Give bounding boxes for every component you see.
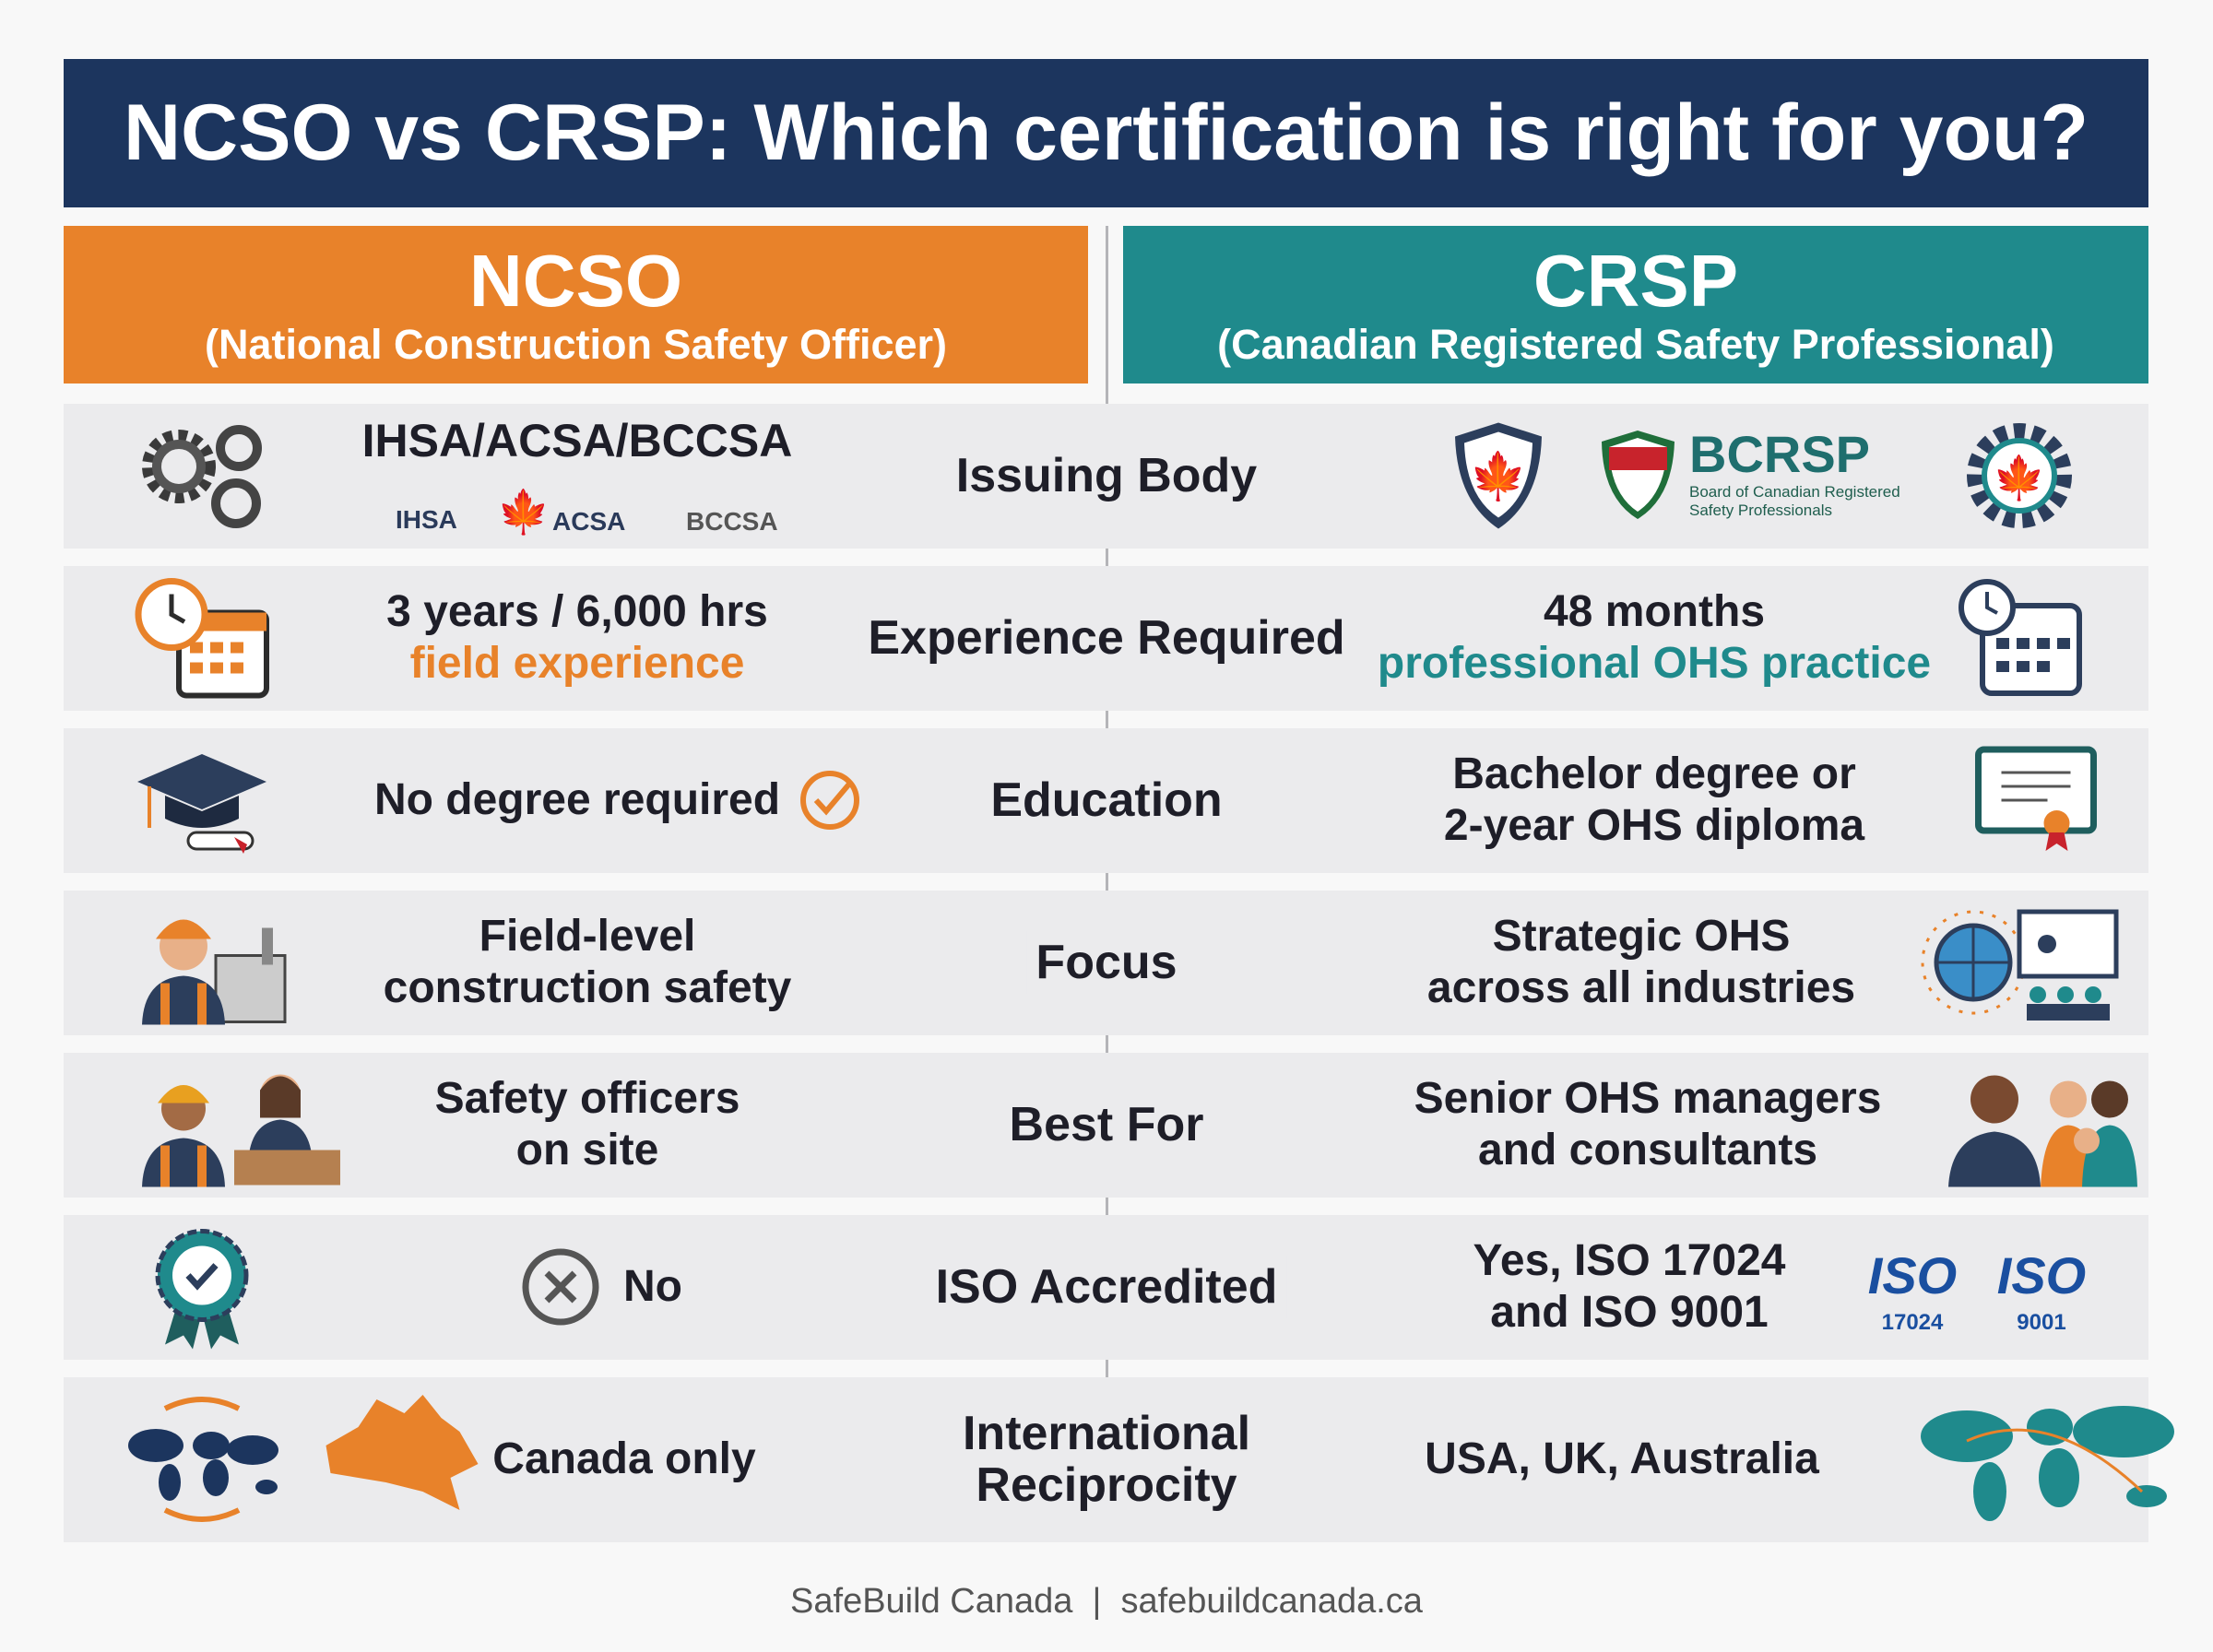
- icon: canada map: [326, 1395, 478, 1510]
- text: 3 years / 6,000 hrs: [386, 587, 768, 688]
- label: Issuing Body: Issuing Body: [956, 449, 1257, 502]
- row: International Reciprocity: [64, 1377, 2148, 1542]
- text: Yes ISO: Yes, ISO 17024: [1473, 1236, 1785, 1285]
- title bar: NCSO vs CRSP: Which certification is right for you?: [124, 88, 2089, 177]
- text: Canada only: Canada only: [492, 1434, 756, 1483]
- text: 48 months: [1378, 587, 1931, 688]
- header: CRSP: (Canadian Registered Safety Professional): [1217, 321, 2054, 368]
- text: Field-level construction safety: Field-level: [479, 912, 695, 961]
- text: Safety officers on site: [435, 1074, 740, 1174]
- icon: graduation cap: [137, 754, 266, 854]
- header: NCSO: NCSO: [469, 240, 682, 322]
- text: Yes ISO: [1473, 1236, 1785, 1337]
- logos: ISO 17024 / ISO 9001: [1868, 1246, 2086, 1335]
- text: No: No: [623, 1262, 682, 1311]
- label: International Reciprocity: International: [963, 1407, 1250, 1460]
- icon: clock calendar teal: [1959, 579, 2082, 696]
- row: ISO Accredited: [64, 1215, 2148, 1360]
- header: NCSO: [64, 226, 1088, 384]
- row: Issuing Body: [64, 404, 2148, 549]
- row: Experience Required: [64, 566, 2148, 711]
- text: 48 months: professional OHS practice: [1378, 639, 1931, 688]
- text: Senior OHS managers: Senior OHS managers: [1414, 1074, 1881, 1123]
- header: CRSP: CRSP: [1533, 240, 1738, 322]
- text: Strategic OHS: Strategic OHS: [1493, 912, 1790, 961]
- icon: certificate: [1975, 747, 2097, 851]
- icon: x circle: [522, 1248, 599, 1326]
- text: Senior OHS managers: [1414, 1074, 1881, 1174]
- icon: team: [1948, 1075, 2137, 1187]
- logo: BCRSP: BCRSP: [1689, 425, 1870, 483]
- icon: clock calendar: [135, 578, 269, 699]
- logos: shield: [1455, 422, 1542, 529]
- icon: gears: [142, 425, 262, 528]
- text: Field-level construction safety: [384, 912, 791, 1012]
- title bar: [64, 59, 2148, 207]
- icon: teal world map: [1921, 1406, 2174, 1521]
- label: Best For: Best For: [1010, 1098, 1203, 1151]
- logos: ISO 17024 / ISO 9001: ISO: [1997, 1246, 2086, 1304]
- text: 3 years / 6,000 hrs: field experience: [410, 639, 744, 688]
- label: International Reciprocity: Reciprocity: [976, 1458, 1237, 1512]
- row: Best For: [64, 1053, 2148, 1198]
- logos: IHSA ACSA BCCSA: ACSA: [552, 507, 625, 536]
- label: Experience Required: Experience Required: [868, 611, 1345, 665]
- text: Bachelor degree: [1444, 749, 1864, 850]
- logos: IHSA ACSA BCCSA: 🍁: [497, 488, 550, 536]
- icon: check circle: [800, 771, 859, 830]
- logo: BCRSP: [1602, 425, 1900, 519]
- logos: IHSA ACSA BCCSA: [396, 488, 778, 536]
- icon: globe presentation: [1922, 909, 2119, 1021]
- logos: shield: 🍁: [1470, 450, 1527, 502]
- header: NCSO: (National Construction Safety Officer): [205, 321, 947, 368]
- text: Yes ISO: and ISO 9001: [1490, 1288, 1769, 1337]
- icon: world with arrows: [128, 1397, 278, 1522]
- text: Safety officers on site: on site: [516, 1126, 658, 1174]
- text: USA UK Australia: USA, UK, Australia: [1425, 1434, 1819, 1483]
- text: No degree required: No degree required: [374, 775, 780, 824]
- label: International Reciprocity: [953, 1402, 1260, 1516]
- logos: IHSA ACSA BCCSA: IHSA: [396, 505, 457, 534]
- icon: construction worker: [142, 920, 286, 1025]
- icon: badge ribbon: [155, 1229, 249, 1350]
- icon: maple gear: [1967, 423, 2072, 528]
- label: Education: Education: [990, 773, 1223, 827]
- text: Strategic OHS: [1427, 912, 1855, 1012]
- logos: IHSA ACSA BCCSA: BCCSA: [686, 507, 778, 536]
- text: Field-level construction safety: construction safety: [384, 963, 791, 1012]
- logo: BCRSP: Board of Canadian Registered: [1689, 483, 1900, 501]
- text: Senior OHS managers: and consultants: [1478, 1126, 1817, 1174]
- logo: BCRSP: Safety Professionals: [1689, 502, 1832, 519]
- logos: ISO 17024 / ISO 9001: 9001: [2017, 1310, 2066, 1335]
- logos: ISO 17024 / ISO 9001: 17024: [1882, 1310, 1943, 1335]
- row: Education: [64, 728, 2148, 873]
- label: Focus: Focus: [1035, 936, 1178, 989]
- text: Bachelor degree: 2-year OHS diploma: [1444, 801, 1864, 850]
- text: Strategic OHS: across all industries: [1427, 963, 1855, 1012]
- text: Safety officers on site: Safety officers: [435, 1074, 740, 1123]
- label: ISO Accredited: ISO Accredited: [936, 1260, 1277, 1314]
- logos: ISO 17024 / ISO 9001: ISO: [1868, 1246, 1957, 1304]
- icon: maple gear: 🍁: [1993, 454, 2046, 502]
- center divider line: [1106, 226, 1108, 1397]
- row: Focus: [64, 891, 2148, 1035]
- header: CRSP: [1123, 226, 2148, 384]
- text: Bachelor degree: Bachelor degree or: [1452, 749, 1856, 798]
- text: 3 years / 6,000 hrs: 3 years / 6,000 hrs: [386, 587, 768, 636]
- icon: worker and officer: [142, 1075, 340, 1187]
- text: IHSA/ACSA/BCCSA: IHSA/ACSA/BCCSA: [362, 415, 792, 466]
- footer: SafeBuild Canada | safebuildcanada.ca: [790, 1582, 1423, 1621]
- text: 48 months: 48 months: [1544, 587, 1765, 636]
